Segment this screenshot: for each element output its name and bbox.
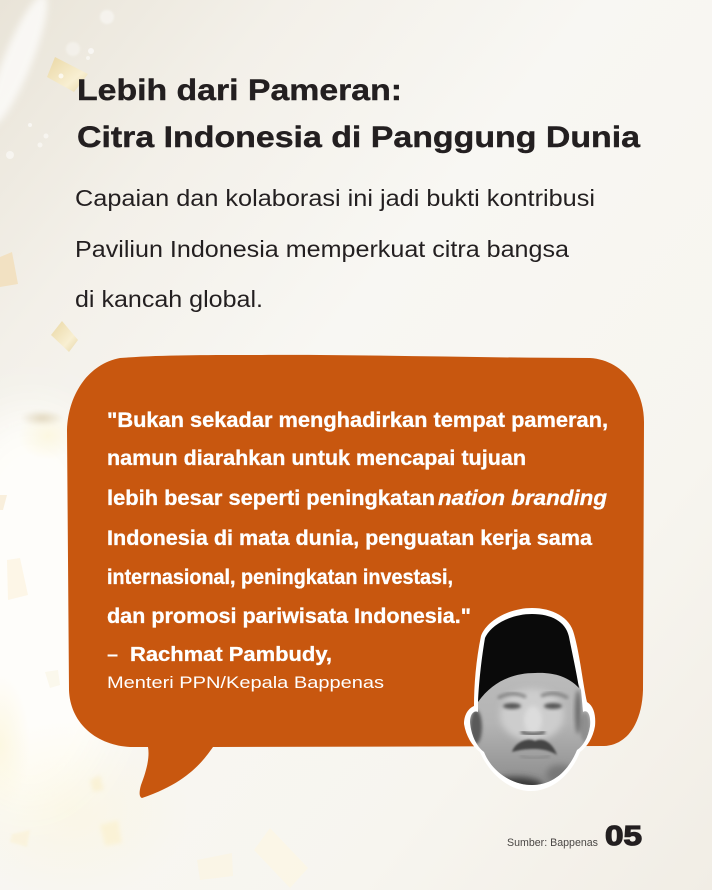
quote text: lebih besar seperti peningkatan [107,487,435,510]
title: Citra Indonesia di Panggung Dunia [77,121,640,154]
quote text: Indonesia di mata dunia, penguatan kerja sama [107,527,592,550]
quote text: nation branding [438,487,607,510]
attribution: Menteri PPN/Kepala Bappenas [107,673,384,692]
quote text: namun diarahkan untuk mencapai tujuan [107,447,526,470]
attribution: Rachmat Pambudy, [130,644,332,666]
quote text: "Bukan sekadar menghadirkan tempat pameran, [107,409,608,432]
quote text [107,409,608,628]
intro text [75,185,595,312]
quote text: dan promosi pariwisata Indonesia." [107,605,471,628]
attribution [107,644,384,692]
confetti [47,57,88,92]
eyes [503,703,521,709]
title: Lebih dari Pameran: [77,74,402,107]
ear and cheek shading [470,710,482,744]
brow shadows [498,694,526,698]
intro text: Paviliun Indonesia memperkuat citra bangsa [75,236,569,262]
head [470,662,590,785]
nose [521,732,545,734]
sparkle dots [100,10,114,24]
peci hat [478,614,579,702]
source note: Sumber: Bappenas [507,837,598,849]
portrait: man with black peci [464,608,595,795]
intro text: di kancah global. [75,286,263,312]
page number: 05 [605,820,642,851]
speech bubble panel [67,355,644,798]
title [77,74,640,154]
sticker outline [464,608,595,791]
quote text: internasional, peningkatan investasi, [107,566,453,589]
attribution: – [107,644,118,666]
moustache [512,740,557,755]
intro text: Capaian dan kolaborasi ini jadi bukti kontribusi [75,185,595,211]
